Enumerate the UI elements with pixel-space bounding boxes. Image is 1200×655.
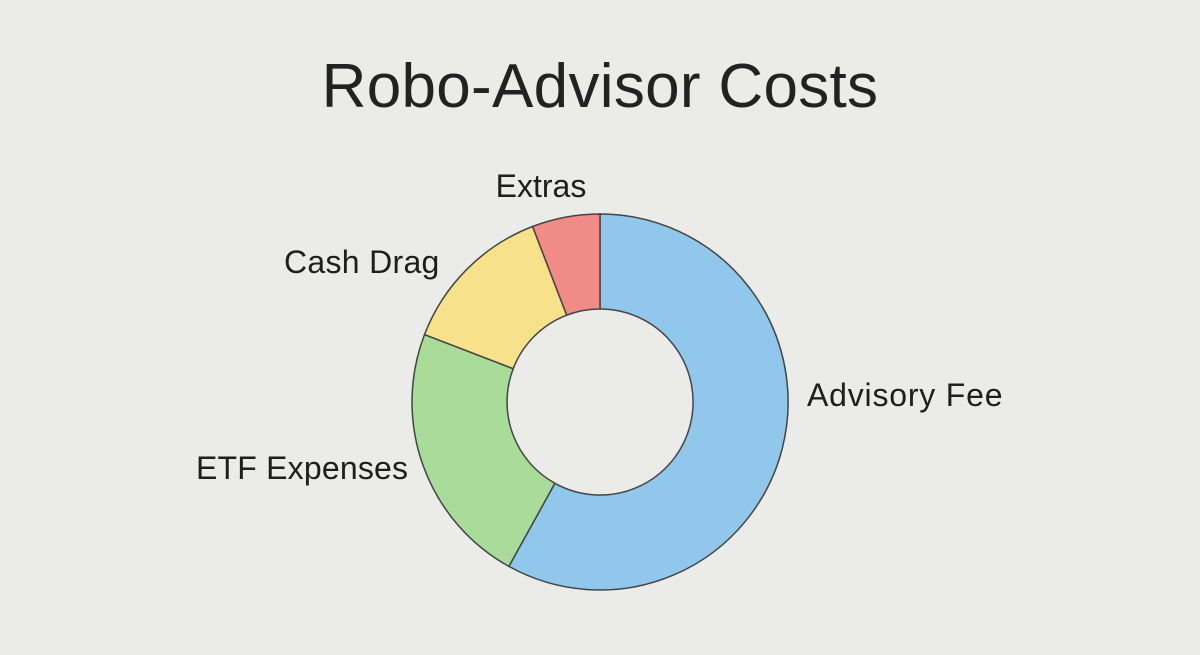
segment: Extras [533, 214, 600, 315]
title: Robo-Advisor Costs [322, 52, 878, 121]
segment: ETF Expenses [412, 335, 555, 566]
label: Extras: Extras [496, 168, 586, 204]
segment: Cash Drag [424, 226, 567, 369]
label: ETF Expenses: ETF Expenses [196, 450, 408, 486]
label: Advisory Fee: Advisory Fee [807, 377, 1003, 413]
segment: Advisory Fee [509, 214, 788, 590]
label: Cash Drag: Cash Drag [284, 244, 440, 280]
